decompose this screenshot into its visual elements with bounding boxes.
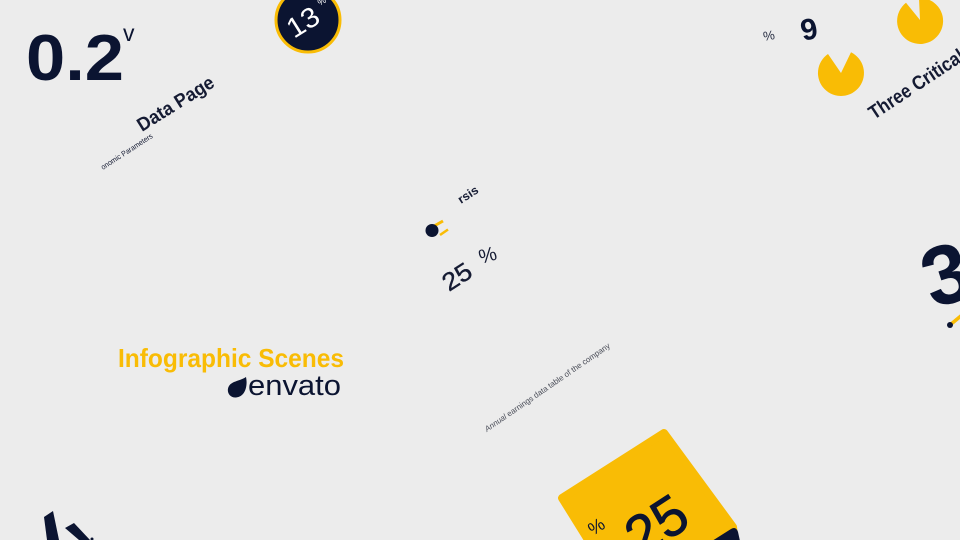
logo: envato: envato xyxy=(248,370,341,402)
card: yellow 25 percent xyxy=(562,433,740,540)
rotated number 9: 9 xyxy=(798,12,821,48)
stat: 25 percent: % xyxy=(476,243,500,269)
card tab xyxy=(712,528,740,540)
card percent sign: % xyxy=(584,514,609,539)
marker: dot with yellow dashes xyxy=(426,221,448,237)
percent sign: % xyxy=(762,27,776,44)
pointer: yellow line and dot xyxy=(947,315,960,328)
cropped dark shapes bottom left xyxy=(44,511,94,540)
big stat: 0.2 V: v xyxy=(123,20,135,46)
badge: 13 percent: 13 xyxy=(281,0,325,44)
caption: economic parameters: onomic Parameters xyxy=(99,131,155,172)
pie icon: upper xyxy=(897,0,943,44)
label: analysis fragment: rsis xyxy=(455,183,481,207)
heading: Data Page: Data Page xyxy=(134,72,218,136)
pie icon: lower xyxy=(818,52,864,96)
stat: 25 percent: 25 xyxy=(437,257,477,297)
big stat: 0.2 V: 0.2 xyxy=(26,21,124,94)
caption: annual earnings: Annual earnings data table of the company xyxy=(482,341,612,434)
title: Infographic Scenes: Infographic Scenes xyxy=(118,343,344,373)
badge: 13 percent xyxy=(276,0,340,52)
stat: 25 percent xyxy=(437,243,500,297)
